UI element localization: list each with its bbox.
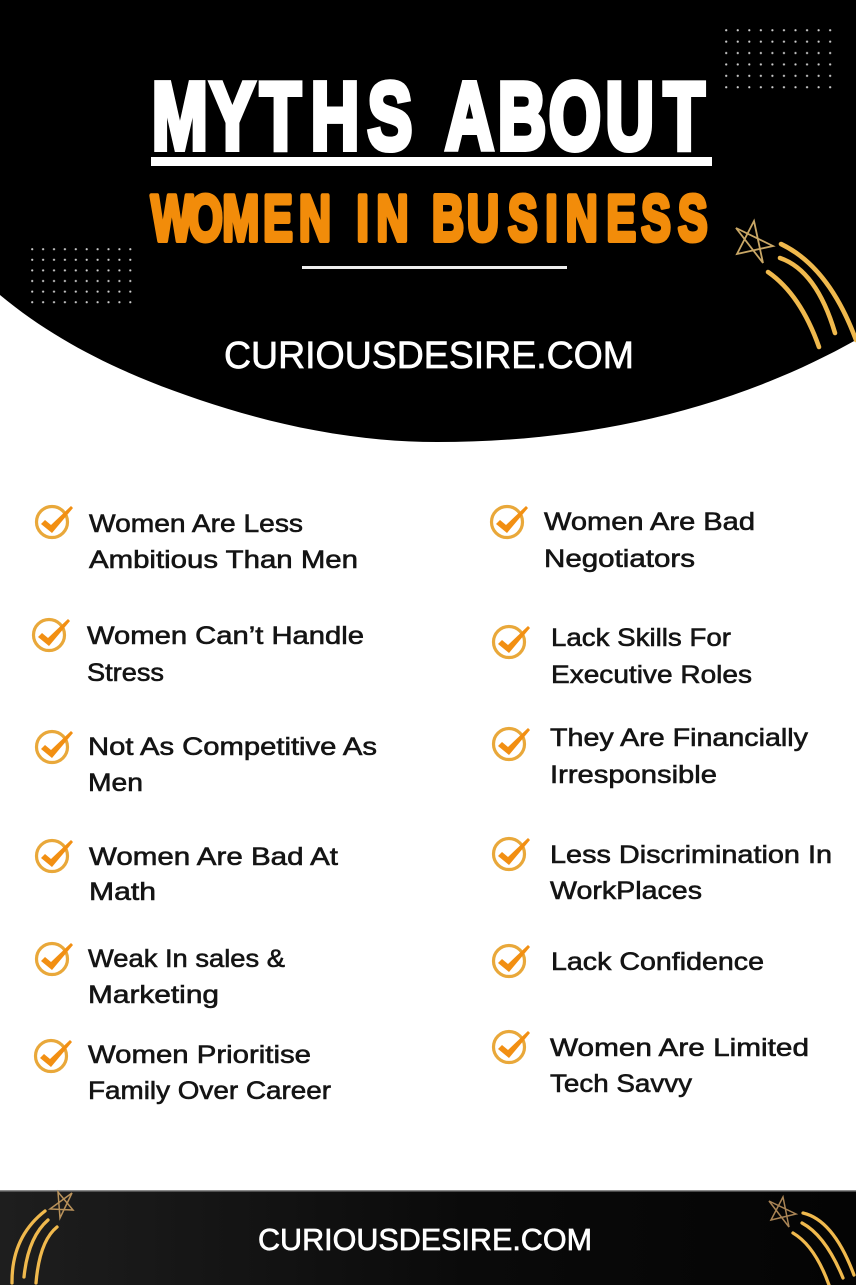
item: discrimination: Less Discrimination In: [550, 841, 832, 869]
item: math: [36, 840, 338, 906]
header: black curved banner: [0, 0, 856, 442]
item: family over career: Family Over Career: [88, 1077, 331, 1105]
item: less ambitious: Ambitious Than Men: [89, 546, 358, 574]
item: financially irresponsible: They Are Financially: [550, 724, 809, 752]
item: discrimination: [494, 838, 832, 905]
item: executive roles: Executive Roles: [551, 661, 752, 689]
item: financially irresponsible: [494, 724, 809, 789]
subtitle: women in business: WOMEN IN BUSINESS: [151, 182, 707, 255]
item: stress: [34, 619, 364, 687]
item: stress: Stress: [87, 659, 164, 687]
item: sales and marketing: Weak In sales &: [88, 945, 285, 973]
item: less ambitious: [36, 506, 358, 574]
item: competitive: Men: [88, 769, 143, 797]
item: competitive: Not As Competitive As: [88, 733, 377, 761]
item: family over career: [36, 1040, 331, 1105]
subtitle rule: [302, 266, 567, 269]
title underline: [151, 157, 712, 166]
item: less ambitious: Women Are Less: [89, 510, 303, 538]
item: tech savvy: [494, 1031, 809, 1098]
item: family over career: Women Prioritise: [88, 1041, 311, 1069]
item: lack confidence: [494, 945, 764, 976]
item: negotiators: Women Are Bad: [544, 508, 755, 536]
icon: shooting star top right: [736, 221, 856, 347]
item: tech savvy: Women Are Limited: [550, 1034, 809, 1062]
item: math: Women Are Bad At: [89, 843, 338, 871]
title: myths about: MYTHS ABOUT: [152, 62, 705, 170]
item: negotiators: Negotiators: [544, 545, 695, 573]
item: negotiators: [492, 506, 755, 573]
footer bar: [0, 1191, 856, 1285]
icon: shooting star footer left: [12, 1192, 73, 1283]
item: sales and marketing: [36, 943, 285, 1009]
item: lack confidence: Lack Confidence: [551, 948, 764, 976]
item: math: Math: [89, 878, 156, 906]
item: discrimination: WorkPlaces: [550, 877, 702, 905]
item: stress: Women Can’t Handle: [87, 622, 364, 650]
list: left column: [34, 506, 377, 1105]
item: sales and marketing: Marketing: [88, 981, 219, 1009]
item: tech savvy: Tech Savvy: [550, 1070, 693, 1098]
item: executive roles: Lack Skills For: [551, 624, 731, 652]
item: executive roles: [494, 624, 752, 689]
icon: shooting star footer right: [769, 1197, 854, 1285]
item: competitive: [36, 731, 377, 797]
item: financially irresponsible: Irresponsible: [550, 761, 717, 789]
website label: footer: CURIOUSDESIRE.COM: [258, 1222, 592, 1257]
dot pattern: left: [31, 248, 132, 304]
dot pattern: top right: [725, 29, 833, 89]
website label: header: CURIOUSDESIRE.COM: [224, 335, 634, 377]
list: right column: [492, 506, 832, 1098]
